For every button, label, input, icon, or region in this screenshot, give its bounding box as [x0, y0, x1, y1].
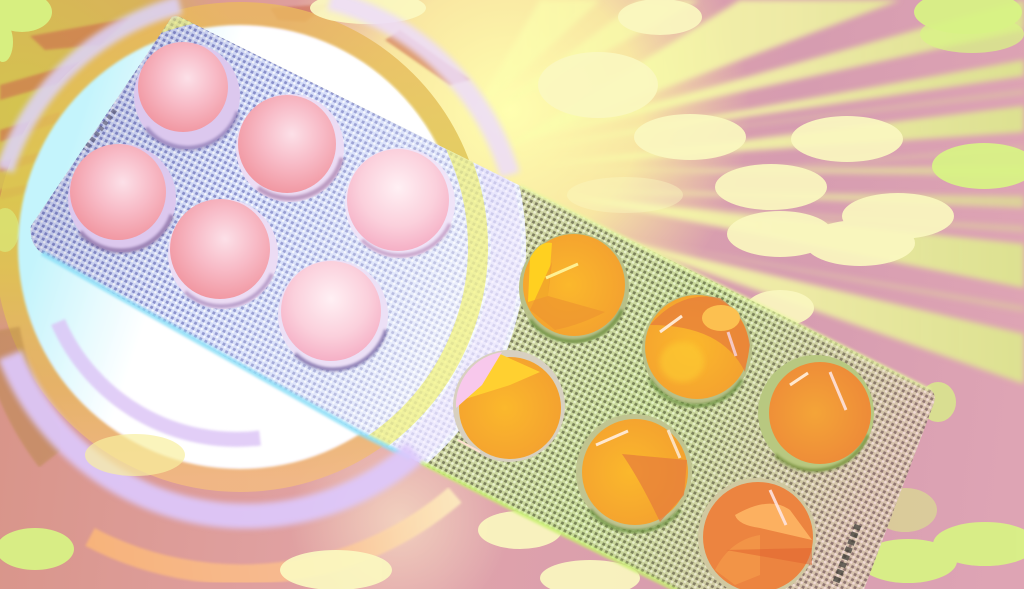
pill 4	[68, 144, 176, 252]
lime glow along lower edge	[420, 462, 700, 589]
foil: silver section	[30, 16, 526, 466]
pill 8	[642, 294, 752, 406]
dark streaks in the upper left	[0, 4, 470, 200]
pill 3	[345, 148, 455, 258]
light rays fanning right	[470, 0, 1024, 384]
pale yellow bokeh spots	[280, 0, 954, 589]
pink pills	[68, 42, 455, 370]
orange pills	[453, 233, 874, 589]
pill 12	[698, 478, 816, 589]
pill 5	[168, 199, 278, 309]
cyan lower edge highlight	[42, 253, 410, 458]
pill 1	[134, 42, 240, 149]
outer faint arc, bottom	[90, 495, 455, 574]
yellow bokeh over the rings	[85, 434, 185, 476]
lilac glow ring	[5, 0, 510, 516]
white disc behind the pack	[18, 25, 462, 469]
pill 9	[758, 355, 874, 471]
outer brown ring, left	[0, 330, 55, 455]
yellow-orange ring	[7, 14, 473, 480]
pill 11	[576, 414, 692, 531]
pill 7	[519, 233, 629, 343]
yellow ring crossing the foil	[161, 16, 521, 460]
pill 6	[278, 260, 388, 370]
pale glow along upper edge	[520, 186, 930, 390]
dark embossed mark near left edge	[85, 110, 115, 150]
inner lilac arc	[58, 322, 260, 439]
pill 2	[236, 94, 344, 202]
dark embossed mark near right edge	[835, 525, 858, 585]
pill 10	[453, 350, 565, 462]
